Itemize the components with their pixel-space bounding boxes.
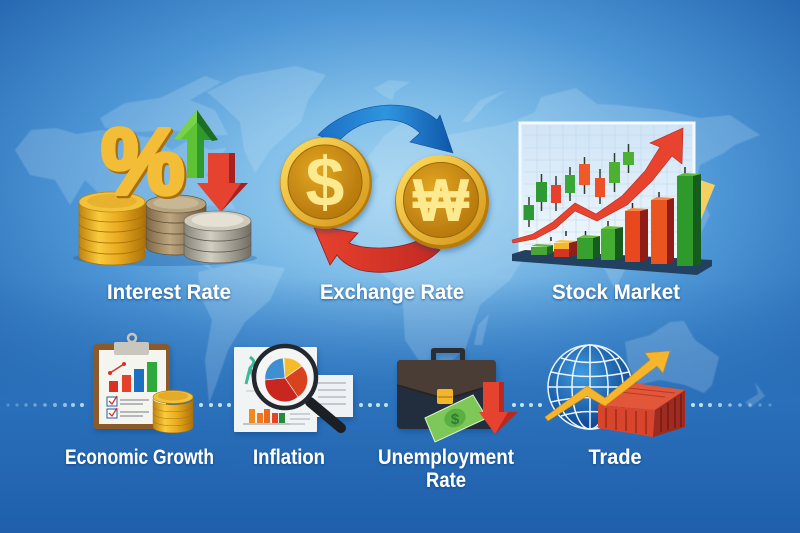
icon: percent sign: % xyxy=(103,111,187,216)
icon: green up arrow xyxy=(174,110,218,178)
label: stock market: Stock Market xyxy=(552,281,680,304)
icon: banknote: $ xyxy=(451,411,460,428)
label: unemployment rate xyxy=(378,446,514,492)
candlesticks xyxy=(524,144,634,227)
icon: briefcase xyxy=(397,348,496,429)
label: trade: Trade xyxy=(588,446,642,469)
dotted connector line xyxy=(6,403,772,407)
icon: exchange rate xyxy=(280,105,489,272)
icon: percent sign: % xyxy=(101,109,185,214)
icon: interest rate xyxy=(73,109,257,266)
icon: won coin xyxy=(395,155,489,249)
icon: dollar coin: $ xyxy=(306,143,344,221)
icon: cargo container xyxy=(598,383,685,437)
bar chart xyxy=(108,362,157,392)
arrow: blue xyxy=(318,105,453,153)
icon: red down arrow xyxy=(479,382,518,434)
icon: dollar coin xyxy=(280,137,372,229)
icon: stock market xyxy=(512,123,715,275)
checklist xyxy=(107,396,149,418)
icon: economic growth xyxy=(93,334,193,433)
label: unemployment rate: Unemployment xyxy=(378,446,514,469)
platform base xyxy=(512,250,712,275)
label: inflation: Inflation xyxy=(253,446,325,469)
icon: gold coins xyxy=(153,390,193,433)
label: economic growth: Economic Growth xyxy=(65,446,214,469)
icon: gold coin stack xyxy=(79,192,145,265)
arrow: red xyxy=(313,225,440,272)
label: unemployment rate: Rate xyxy=(426,469,466,492)
label: exchange rate: Exchange Rate xyxy=(320,281,464,304)
icon: silver coin stack xyxy=(184,211,251,263)
icon: won coin: ₩ xyxy=(413,167,470,234)
documents xyxy=(234,347,353,432)
icon: trade xyxy=(545,345,685,437)
label: interest rate: Interest Rate xyxy=(107,281,231,304)
arrow: red trend line xyxy=(512,128,683,243)
icon: magnifier xyxy=(254,346,341,428)
icon: unemployment rate xyxy=(397,348,518,442)
pie chart xyxy=(265,358,308,402)
icon: clipboard xyxy=(93,334,170,429)
icon: brown coin stack xyxy=(146,195,206,255)
icon: globe xyxy=(548,345,632,429)
bar chart xyxy=(531,167,701,266)
icon: inflation xyxy=(234,346,353,432)
arrow: yellow trend xyxy=(545,351,670,421)
world map xyxy=(15,66,765,408)
icon: red down arrow xyxy=(197,153,248,212)
bar chart xyxy=(243,409,310,424)
